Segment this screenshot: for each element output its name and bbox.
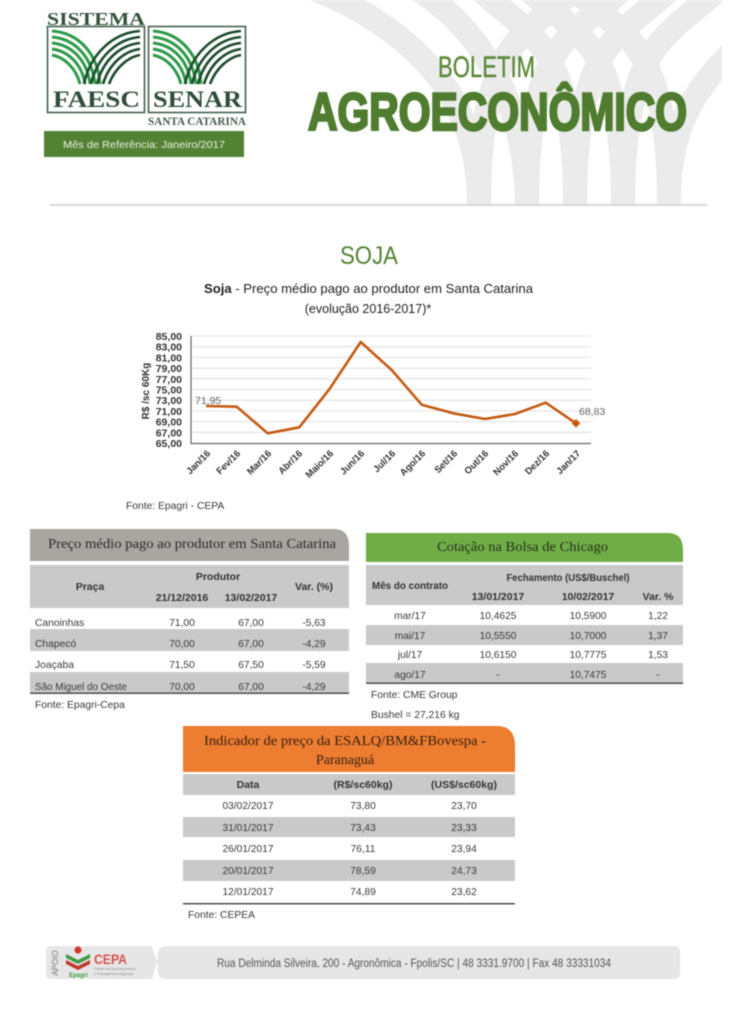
table rows: 71,50 [169, 660, 195, 671]
table header: Praça [76, 581, 104, 593]
table rows: São Miguel do Oeste [35, 682, 127, 693]
table rows: 1,22 [648, 611, 668, 622]
y axis labels: 73,00 [156, 395, 182, 407]
logo: SENAR Santa Catarina [148, 26, 246, 128]
footer [46, 946, 680, 979]
chart title [204, 282, 533, 316]
table rows: 31/01/2017 [222, 823, 274, 834]
reference month banner: Mês de Referência: Janeiro/2017 [63, 139, 225, 151]
table header: 13/01/2017 [472, 591, 524, 603]
table rows: 73,80 [350, 801, 376, 812]
table rows: mai/17 [395, 631, 426, 642]
table header: 10/02/2017 [562, 591, 614, 603]
x axis labels: Out/16 [462, 448, 491, 477]
table rows: 10,7775 [570, 650, 607, 661]
table header: (R$/sc60kg) [334, 779, 392, 791]
y axis labels: 81,00 [156, 352, 182, 364]
chart title: (evolução 2016-2017)* [305, 302, 431, 316]
y axis labels: 65,00 [156, 438, 182, 450]
data label last: 68,83 [579, 406, 605, 418]
table header: 21/12/2016 [156, 592, 208, 604]
title: Boletim Agroeconômico: BOLETIM [438, 51, 535, 84]
x axis labels: Jun/16 [338, 448, 367, 477]
table rows: 23,94 [451, 844, 477, 855]
table rows: 70,00 [169, 682, 195, 693]
table rows: 10,5550 [480, 631, 517, 642]
panel header: Paranaguá [316, 753, 375, 768]
x axis labels: Set/16 [433, 448, 460, 476]
table rows [183, 801, 515, 904]
table notes: Fonte: CME Group [371, 690, 458, 701]
table rows: - [496, 670, 500, 681]
table rows: 67,00 [238, 618, 264, 629]
title: Boletim Agroeconômico [308, 51, 687, 142]
table rows: -5,59 [302, 660, 326, 671]
panel header: Cotação na Bolsa de Chicago [437, 539, 608, 554]
y axis title: R$ /sc 60Kg [141, 363, 152, 419]
y axis labels: 71,00 [156, 406, 182, 418]
table header [183, 774, 515, 795]
panel header [183, 726, 515, 772]
table header [30, 565, 349, 608]
x axis labels: Mar/16 [245, 448, 274, 477]
y axis labels: 85,00 [156, 331, 182, 343]
footer address bar [157, 946, 680, 979]
x axis labels: Ago/16 [398, 448, 428, 479]
footer logo box: CEPA [94, 952, 127, 967]
table rows: 24,73 [451, 866, 477, 877]
data label first: 71,95 [195, 395, 221, 407]
table rows: mar/17 [394, 611, 426, 622]
panel header [366, 533, 683, 562]
table header: Fechamento (US$/Buschel) [506, 572, 630, 584]
table rows: 70,00 [169, 639, 195, 650]
y axis labels: 79,00 [156, 363, 182, 375]
table rows: 20/01/2017 [222, 866, 274, 877]
table rows: 10,5900 [570, 611, 607, 622]
table header: Data [237, 779, 260, 791]
footer logo box: e Planejamento Agrícola [94, 972, 133, 976]
table rows: 67,00 [238, 639, 264, 650]
panel: bolsa de Chicago [366, 533, 683, 721]
header background wheat pattern [312, 0, 745, 205]
x axis labels: Jan/16 [184, 448, 213, 477]
logo: Sistema FAESC [47, 9, 145, 112]
x axis labels: Nov/16 [491, 448, 521, 478]
heading: Soja: SOJA [340, 242, 398, 270]
panel header: Preço médio pago ao produtor em Santa Catarina [48, 536, 336, 551]
x axis labels: Dez/16 [523, 448, 552, 477]
table rows: -4,29 [302, 639, 326, 650]
table header [366, 565, 683, 605]
table header: Produtor [196, 571, 240, 583]
x axis labels: Fev/16 [214, 448, 243, 477]
y axis labels: 69,00 [156, 417, 182, 429]
y axis labels: 67,00 [156, 427, 182, 439]
table rows: Chapecó [35, 639, 76, 650]
table rows: 67,50 [238, 660, 264, 671]
x axis labels: Abr/16 [276, 448, 305, 477]
table rows: -4,29 [302, 682, 326, 693]
chart source: Fonte: Epagri - CEPA [126, 501, 224, 512]
table header: Mês do contrato [372, 580, 448, 592]
y axis labels: 77,00 [156, 374, 182, 386]
logo: Sistema FAESC: FAESC [53, 87, 140, 112]
table rows: 78,59 [350, 866, 376, 877]
table rows: 71,00 [169, 618, 195, 629]
logo: SENAR Santa Catarina: SENAR [153, 87, 242, 112]
table rows: 10,6150 [480, 650, 517, 661]
footer logo box [46, 946, 157, 979]
table rows: 1,37 [648, 631, 668, 642]
end marker [572, 419, 580, 428]
table rows: 03/02/2017 [222, 801, 274, 812]
table notes [371, 690, 460, 721]
table rows: -5,63 [302, 618, 326, 629]
table rows: 76,11 [351, 844, 376, 855]
reference month banner [44, 131, 244, 157]
table source: Fonte: Epagri-Cepa [35, 700, 125, 711]
price line [206, 342, 576, 433]
table header: Var. (%) [295, 581, 333, 593]
table rows: 74,89 [350, 887, 376, 898]
footer logo box: APOIO [51, 950, 60, 976]
table rows [366, 611, 683, 684]
table rows: Canoinhas [35, 618, 84, 629]
table notes: Bushel = 27,216 kg [371, 710, 460, 721]
table header: Var. % [643, 591, 674, 603]
chart title: Soja - Preço médio pago ao produtor em Santa Catarina [204, 282, 533, 296]
x axis labels: Maio/16 [304, 448, 336, 481]
panel: indicador ESALQ [183, 726, 515, 921]
table rows: 10,7000 [570, 631, 607, 642]
panel: preço médio produtor [30, 529, 349, 711]
x axis labels [184, 448, 583, 481]
footer logo box: Centro de Socioeconomia [94, 967, 135, 971]
x axis labels: Jul/16 [371, 448, 398, 475]
table rows: 26/01/2017 [222, 844, 274, 855]
x axis labels: Jan/17 [554, 448, 583, 477]
table rows: 12/01/2017 [222, 887, 274, 898]
logo: SENAR Santa Catarina: SANTA CATARINA [148, 114, 246, 128]
table rows: Joaçaba [35, 660, 74, 671]
table rows: 73,43 [350, 823, 376, 834]
table rows: - [656, 670, 660, 681]
footer address bar: Rua Delminda Silveira, 200 - Agronômica - Fpolis/SC | 48 3331.9700 | Fax 48 33331034 [217, 958, 612, 970]
y axis labels: 75,00 [156, 384, 182, 396]
panel header [30, 529, 349, 561]
table rows: 10,7475 [570, 670, 607, 681]
panel header: Indicador de preço da ESALQ/BM&FBovespa - [204, 734, 486, 749]
line chart [141, 331, 605, 481]
table rows: 67,00 [238, 682, 264, 693]
table rows: 23,33 [451, 823, 477, 834]
y axis labels: 83,00 [156, 342, 182, 354]
table rows: 1,53 [648, 650, 668, 661]
table rows: 23,70 [451, 801, 477, 812]
y axis labels [156, 331, 182, 450]
table header: 13/02/2017 [225, 592, 277, 604]
table rows [30, 618, 349, 694]
footer logo box: Epagri [69, 973, 88, 979]
logo: Sistema FAESC: SISTEMA [47, 9, 145, 29]
table rows: 23,62 [451, 887, 477, 898]
table source: Fonte: CEPEA [188, 910, 255, 921]
table rows: jul/17 [397, 650, 423, 661]
table rows: 10,4625 [480, 611, 517, 622]
table rows: ago/17 [394, 670, 426, 681]
table header: (US$/sc60kg) [431, 779, 497, 791]
